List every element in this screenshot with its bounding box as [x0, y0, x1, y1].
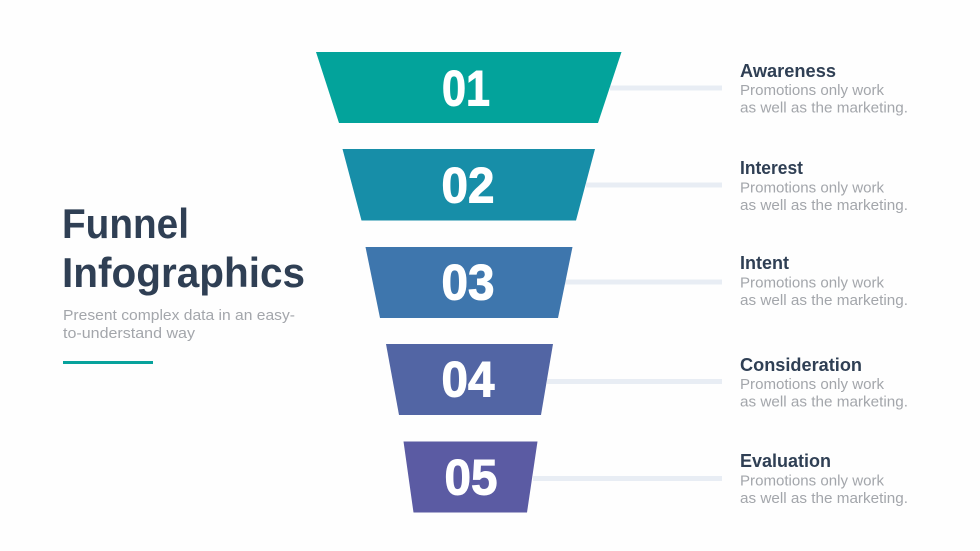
funnel level 03: 03: [442, 254, 494, 310]
subtitle text: [63, 307, 295, 342]
funnel level 01: 01: [442, 60, 490, 116]
funnel level 03: [366, 247, 572, 318]
title: Funnel: [62, 200, 189, 247]
label: Interest: as well as the marketing.: [740, 197, 908, 214]
label: Evaluation: Promotions only work: [740, 472, 884, 490]
label: Awareness: [740, 61, 908, 116]
label: Intent: Promotions only work: [740, 274, 884, 292]
funnel level 02: 02: [442, 158, 494, 214]
label: Intent: as well as the marketing.: [740, 292, 908, 309]
title: [62, 200, 305, 296]
subtitle text: to-understand way: [63, 325, 196, 342]
funnel level 02: [342, 149, 595, 220]
label: Consideration: as well as the marketing.: [740, 394, 908, 410]
label: Interest: [740, 158, 908, 214]
funnel level 04: [386, 344, 553, 415]
label: Consideration: Consideration: [740, 355, 862, 375]
label: Awareness: Promotions only work: [740, 82, 884, 99]
label: Intent: [740, 253, 908, 309]
subtitle text: Present complex data in an easy-: [63, 307, 295, 324]
label: Consideration: [740, 355, 908, 410]
title: Infographics: [62, 249, 305, 296]
label: Evaluation: Evaluation: [740, 451, 831, 471]
label: Consideration: Promotions only work: [740, 376, 884, 393]
label: Interest: Interest: [740, 158, 803, 178]
funnel level 05: [404, 442, 538, 512]
label: Evaluation: [740, 451, 908, 507]
funnel level 01: [316, 52, 622, 123]
label: Awareness: as well as the marketing.: [740, 100, 908, 116]
connector lines: [533, 86, 722, 481]
funnel level 04: 04: [442, 352, 495, 408]
label: Evaluation: as well as the marketing.: [740, 490, 908, 507]
funnel level 05: 05: [444, 450, 498, 506]
label: Awareness: Awareness: [740, 61, 836, 81]
label: Interest: Promotions only work: [740, 180, 884, 196]
accent bar: [63, 361, 153, 364]
label: Intent: Intent: [740, 253, 789, 273]
